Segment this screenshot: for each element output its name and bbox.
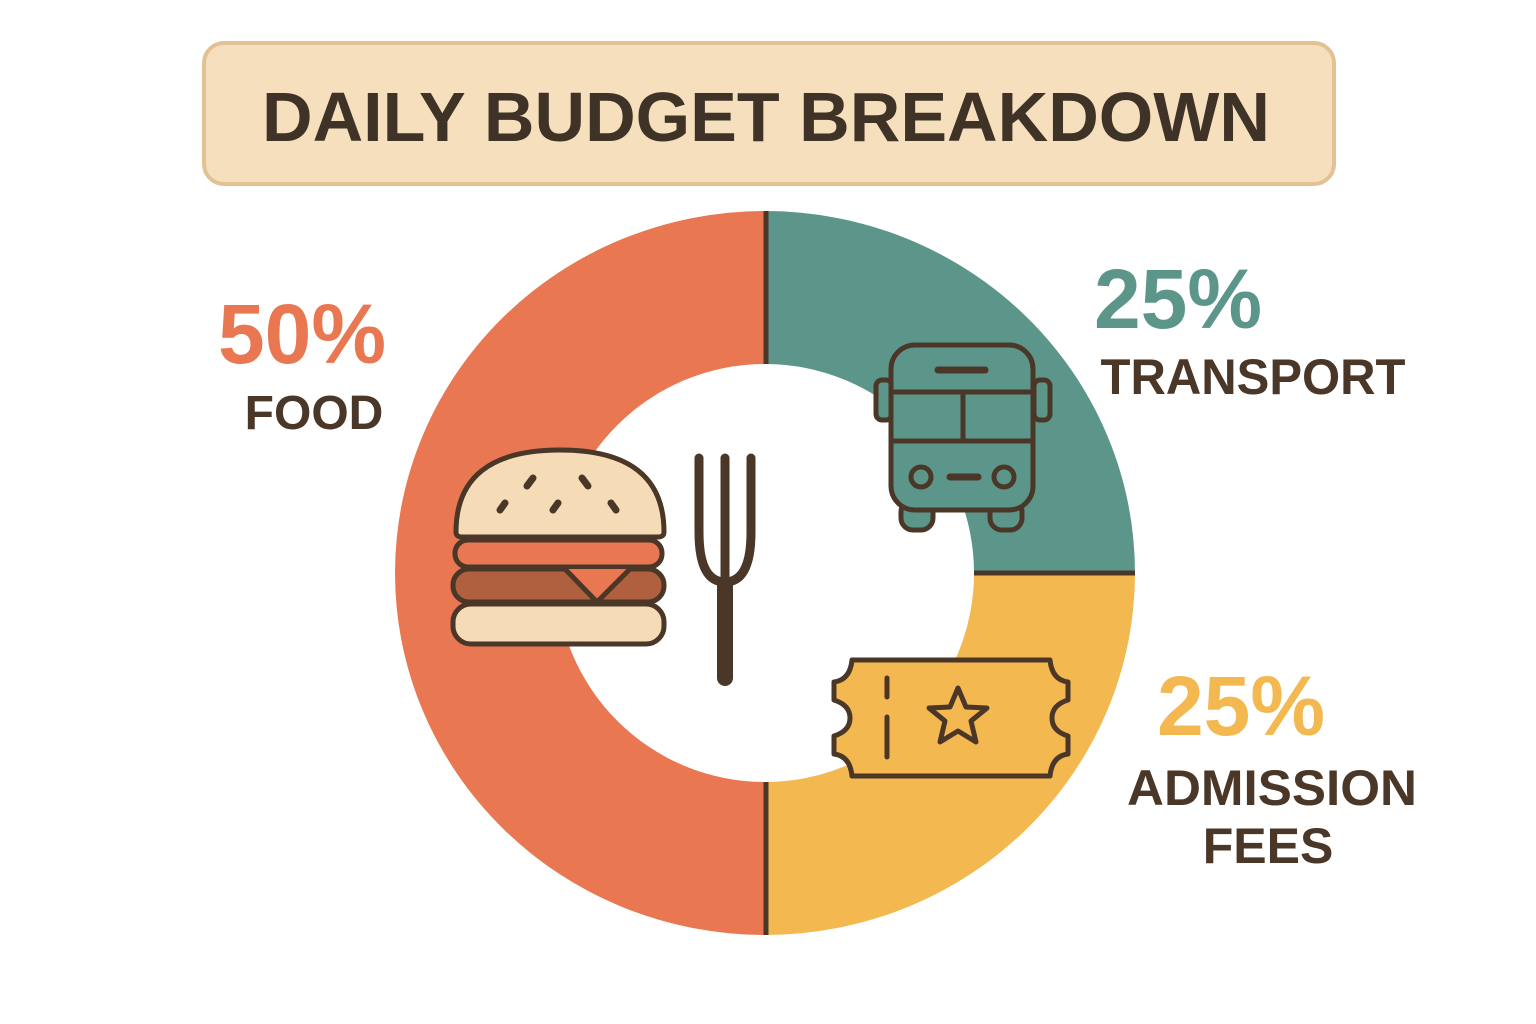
icon: burger bbox=[453, 450, 664, 644]
label: admission fees 25%: FEES bbox=[1203, 818, 1333, 874]
segment: food bbox=[395, 211, 765, 935]
title banner: DAILY BUDGET BREAKDOWN bbox=[262, 78, 1270, 156]
label: food 50%: 50% bbox=[218, 287, 386, 381]
label: transport 25%: TRANSPORT bbox=[1100, 349, 1406, 405]
icon: ticket bbox=[834, 660, 1068, 776]
segment: admission fees bbox=[765, 573, 1135, 935]
label: admission fees 25%: 25% bbox=[1157, 659, 1325, 753]
donut chart bbox=[395, 211, 1135, 935]
title banner bbox=[204, 43, 1334, 184]
icon: fork bbox=[699, 458, 751, 678]
icon: bus bbox=[876, 345, 1050, 530]
label: admission fees 25% bbox=[1127, 659, 1417, 874]
label: food 50% bbox=[218, 287, 386, 440]
label: food 50%: FOOD bbox=[245, 387, 383, 440]
segment: transport bbox=[765, 211, 1135, 573]
label: transport 25%: 25% bbox=[1094, 252, 1262, 346]
label: transport 25% bbox=[1094, 252, 1406, 405]
label: admission fees 25%: ADMISSION bbox=[1127, 760, 1417, 816]
